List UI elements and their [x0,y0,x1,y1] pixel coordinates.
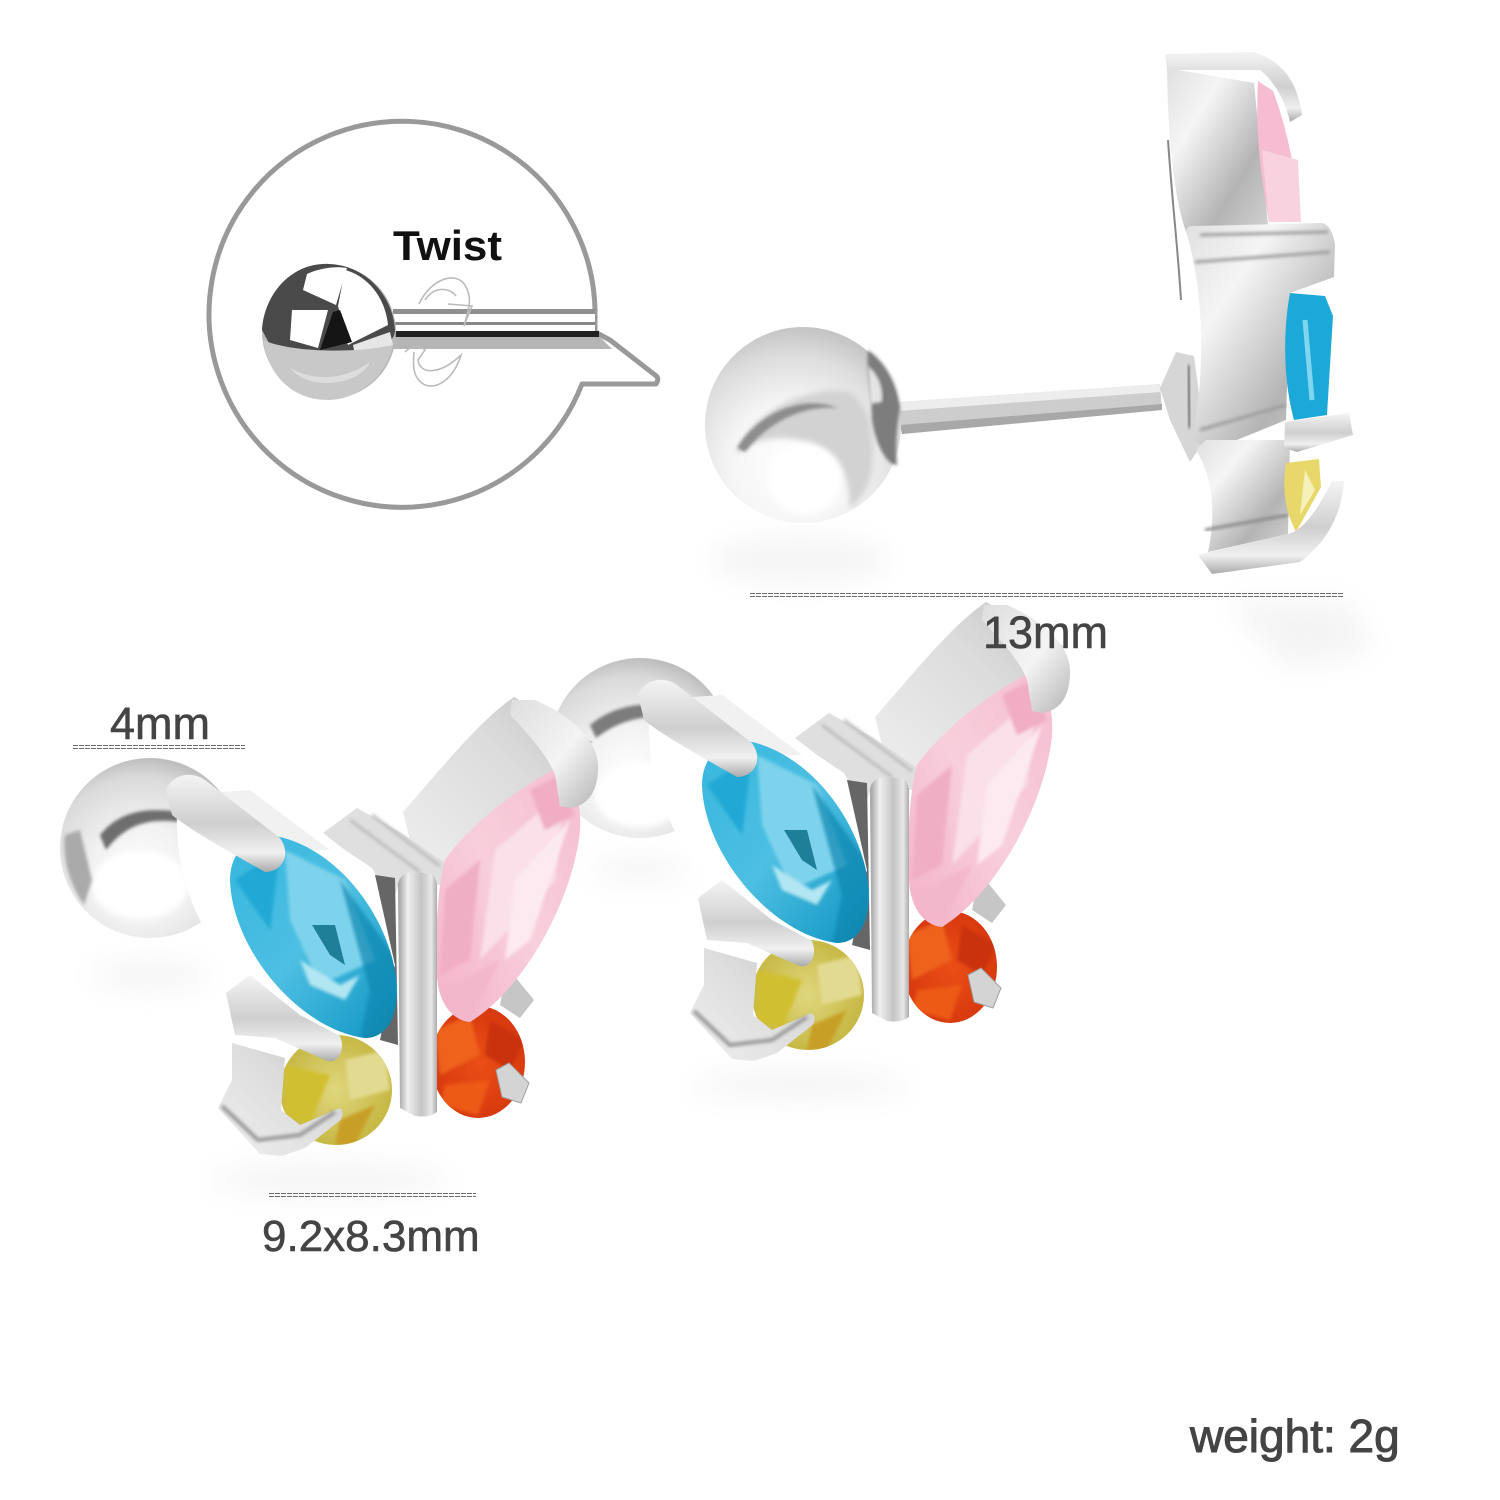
bubble outline [209,121,658,507]
upper right wing band [403,697,593,880]
side ball [705,327,901,523]
measure line: 4mm [73,746,245,748]
small steel ball [262,264,396,400]
pink stone [430,760,585,1030]
side upper wing [1167,68,1268,232]
red stone back prong [500,978,534,1018]
side rod [898,384,1162,434]
white wing backing [177,795,310,1010]
measure line: 9.2x8.3mm [269,1194,476,1196]
side blue stone [1285,293,1333,420]
callout: twist bubble [209,121,658,507]
upper left prong [166,775,285,872]
soft reflections and shadows [90,538,1375,1196]
second ball, front view [550,658,730,838]
side lower prongs [1284,413,1353,452]
yellow stone [275,1030,395,1150]
center collar [323,808,453,905]
red stone prong [496,1063,529,1103]
twist label: Twist [393,222,502,269]
center bar [398,872,437,1116]
first ball, front view [60,758,240,938]
butterfly earring, front view right [638,602,1070,1061]
blue stone [225,825,400,1045]
label: 4mm: 4mm [110,698,210,749]
label: dimensions: 9.2x8.3mm [262,1212,480,1261]
side middle wing [1186,223,1335,450]
side view earring [705,52,1353,574]
lower left wing and prongs [218,1043,343,1156]
label: 13mm: 13mm [983,607,1108,658]
side top prong [1165,52,1302,122]
red stone [425,1000,535,1125]
side lower wing [1196,440,1290,552]
measure line: 13mm [750,594,1344,596]
bar with threaded rod [393,309,612,349]
butterfly earring, front view left [166,697,598,1156]
label: weight: weight: 2g [1189,1410,1400,1462]
side yellow stone [1284,459,1321,532]
upper right prong [510,700,598,808]
side pink stone [1257,81,1301,222]
twist arrows [405,278,472,386]
side collar [1160,352,1205,462]
